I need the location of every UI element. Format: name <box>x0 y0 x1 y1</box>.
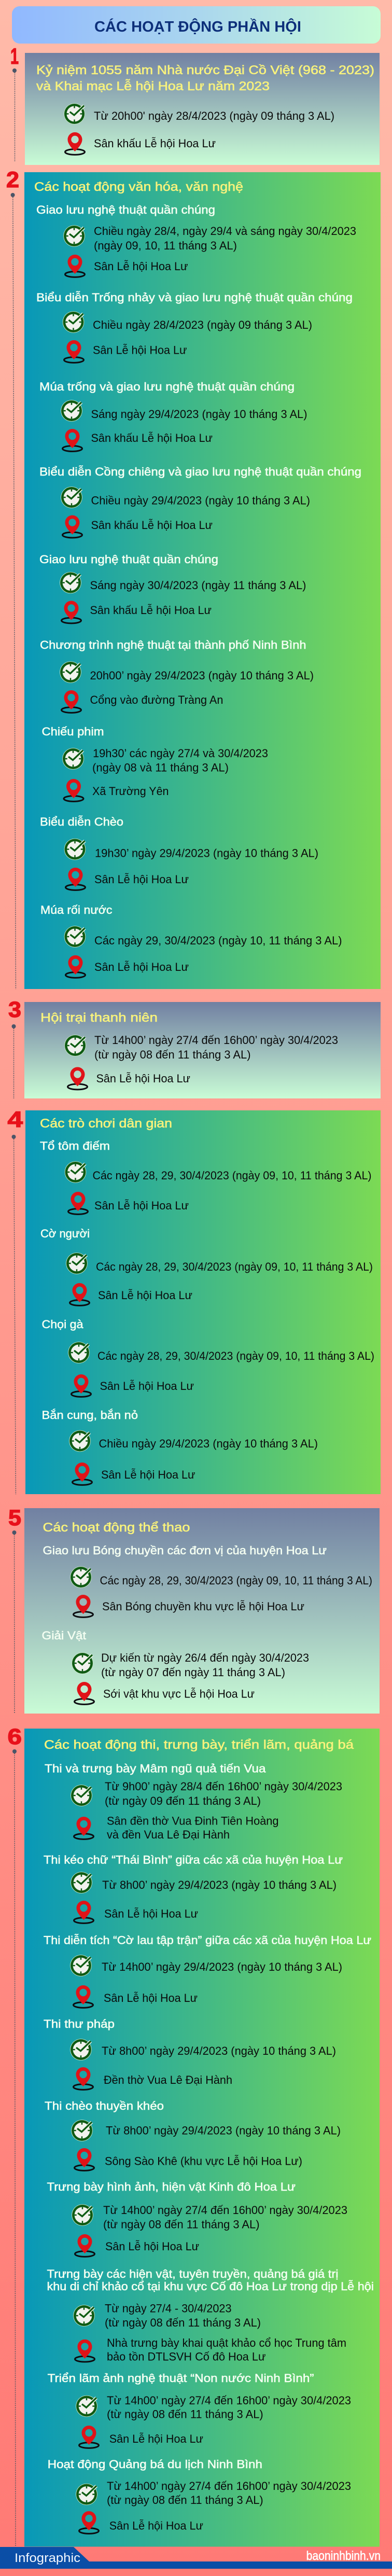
icon: clock <box>76 2484 97 2505</box>
time text: Chiều ngày 29/4/2023 (ngày 10 tháng 3 AL) <box>91 494 310 507</box>
time text: (từ ngày 08 đến 11 tháng 3 AL) <box>107 2494 263 2507</box>
heading: section 6: Các hoạt động thi, trưng bày, triển lãm, quảng bá <box>44 1738 354 1752</box>
place text: Sân khấu Lễ hội Hoa Lư <box>91 431 213 444</box>
subheading: Thi diễn tích “Cờ lau tập trận” giữa các xã của huyện Hoa Lư <box>44 1933 371 1947</box>
heading: section 5: Các hoạt động thể thao <box>43 1521 190 1535</box>
place text: Sân Lễ hội Hoa Lư <box>109 2432 203 2445</box>
icon: clock <box>60 572 81 593</box>
panel: section 4 background <box>25 1110 381 1494</box>
section 1: opening ceremony <box>10 44 380 165</box>
subheading: Múa trống và giao lưu nghệ thuật quần chúng <box>39 380 295 393</box>
panel: section 5 background <box>24 1508 380 1714</box>
icon: clock <box>64 1035 86 1056</box>
subheading: Chọi gà <box>41 1318 83 1331</box>
time text: 19h30’ ngày 29/4/2023 (ngày 10 tháng 3 AL) <box>95 846 318 860</box>
time text: Chiều ngày 28/4, ngày 29/4 và sáng ngày 30/4/2023 <box>94 225 356 238</box>
place text: Sông Sào Khê (khu vực Lễ hội Hoa Lư) <box>105 2154 302 2168</box>
icon: clock <box>73 2305 95 2327</box>
time text: (ngày 08 và 11 tháng 3 AL) <box>92 761 229 774</box>
icon: clock <box>61 486 82 508</box>
time text <box>105 1780 342 1807</box>
panel: section 1 background <box>25 53 380 165</box>
heading: section 1: và Khai mạc Lễ hội Hoa Lư năm 2023 <box>36 79 270 93</box>
time text: Từ 20h00' ngày 28/4/2023 (ngày 09 tháng 3 AL) <box>94 109 334 122</box>
place text: Sân Lễ hội Hoa Lư <box>104 1907 198 1920</box>
icon: location pin <box>69 1283 89 1305</box>
place text: Xã Trường Yên <box>92 785 169 798</box>
icon: location pin <box>67 1067 87 1090</box>
time text: 20h00’ ngày 29/4/2023 (ngày 10 tháng 3 AL) <box>90 669 314 682</box>
heading: section 2: Các hoạt động văn hóa, văn nghệ <box>34 180 243 194</box>
subheading: Thi thư pháp <box>44 2017 115 2030</box>
icon: clock <box>66 1252 88 1274</box>
subheading: Thi chèo thuyền khéo <box>45 2099 164 2112</box>
icon: location pin <box>64 779 83 801</box>
place text <box>107 2336 346 2363</box>
time text: Từ 14h00’ ngày 27/4 đến 16h00’ ngày 30/4/2023 <box>107 2480 351 2493</box>
icon: location pin <box>74 2067 93 2090</box>
subheading: Hoạt động Quảng bá du lịch Ninh Bình <box>48 2458 262 2471</box>
icon: location pin <box>74 1901 93 1923</box>
place text: Sân Lễ hội Hoa Lư <box>93 343 187 357</box>
number 6: 6 <box>7 1724 22 1749</box>
icon: clock <box>70 2039 92 2060</box>
timeline connector 6 <box>12 1749 17 2546</box>
time text: (từ ngày 08 đến 11 tháng 3 AL) <box>94 1048 251 1061</box>
icon: clock <box>63 225 85 247</box>
icon: location pin <box>75 2340 94 2362</box>
time text: 19h30’ các ngày 27/4 và 30/4/2023 <box>93 747 268 760</box>
icon: location pin <box>65 955 85 978</box>
time text: Từ 8h00’ ngày 29/4/2023 (ngày 10 tháng 3 AL) <box>102 2044 336 2057</box>
time text: (từ ngày 08 đến 11 tháng 3 AL) <box>105 2316 261 2329</box>
number 1: 1 <box>10 44 19 69</box>
time text: Từ 14h00’ ngày 27/4 đến 16h00’ ngày 30/4/2023 <box>103 2204 347 2217</box>
icon: clock <box>71 2120 93 2141</box>
time text: Từ ngày 27/4 - 30/4/2023 <box>105 2302 231 2315</box>
icon: location pin <box>68 1192 88 1214</box>
icon: clock <box>70 1566 92 1588</box>
panel: section 2 background <box>24 172 381 989</box>
time text: Chiều ngày 29/4/2023 (ngày 10 tháng 3 AL) <box>99 1437 318 1450</box>
time text: Sáng ngày 30/4/2023 (ngày 11 tháng 3 AL) <box>90 579 306 592</box>
title: CÁC HOẠT ĐỘNG PHẦN HỘI <box>94 18 301 35</box>
icon: location pin <box>75 1682 94 1704</box>
time text: Dự kiến từ ngày 26/4 đến ngày 30/4/2023 <box>101 1651 309 1664</box>
subheading: Giải Vật <box>41 1629 86 1642</box>
panel: section 6 background <box>24 1729 380 2546</box>
time text: (từ ngày 08 đến 11 tháng 3 AL) <box>103 2218 259 2231</box>
icon: location pin <box>74 1595 93 1617</box>
subheading: Trưng bày các hiện vật, tuyên truyền, quảng bá giá trị <box>47 2267 338 2280</box>
heading: section 4: Các trò chơi dân gian <box>40 1117 172 1131</box>
icon: clock <box>70 1955 92 1976</box>
subheading: Múa rối nước <box>40 903 112 916</box>
subheading: khu di chỉ khảo cổ tại khu vực Cố đô Hoa Lư trong dịp Lễ hội <box>47 2280 374 2293</box>
section 3: youth camp <box>8 997 381 1098</box>
icon: clock <box>60 661 81 683</box>
number 2: 2 <box>6 168 19 192</box>
time text: Các ngày 28, 29, 30/4/2023 (ngày 09, 10, 11 tháng 3 AL) <box>96 1260 373 1273</box>
footer label: Infographic <box>15 2551 80 2565</box>
time text: Từ 8h00’ ngày 29/4/2023 (ngày 10 tháng 3 AL) <box>106 2124 341 2137</box>
icon: location pin <box>62 516 82 538</box>
time text <box>103 2204 347 2231</box>
place text: Sân Lễ hội Hoa Lư <box>101 1468 195 1481</box>
icon: location pin <box>72 1374 91 1397</box>
time text: Từ 14h00’ ngày 29/4/2023 (ngày 10 tháng 3 AL) <box>102 1960 342 1973</box>
time text: Các ngày 29, 30/4/2023 (ngày 10, 11 tháng 3 AL) <box>94 934 342 947</box>
heading: section 3: Hội trại thanh niên <box>40 1011 158 1025</box>
time text <box>105 2302 261 2329</box>
time text <box>94 1034 338 1061</box>
time text <box>92 747 268 774</box>
icon: location pin <box>79 2511 99 2533</box>
place text: Sân khấu Lễ hội Hoa Lư <box>91 519 213 532</box>
subheading: Tổ tôm điếm <box>40 1139 110 1152</box>
icon: location pin <box>74 1985 93 2008</box>
place text: Sân Lễ hội Hoa Lư <box>94 960 189 973</box>
time text: Từ 9h00’ ngày 28/4 đến 16h00’ ngày 30/4/2023 <box>105 1780 342 1793</box>
icon: location pin <box>75 2148 94 2170</box>
icon: clock <box>63 311 84 333</box>
time text: (từ ngày 07 đến ngày 11 tháng 3 AL) <box>101 1666 285 1679</box>
time text: (từ ngày 09 đến 11 tháng 3 AL) <box>105 1794 261 1807</box>
icon: location pin <box>61 601 81 623</box>
time text <box>107 2480 351 2507</box>
time text: Sáng ngày 29/4/2023 (ngày 10 tháng 3 AL) <box>91 408 307 421</box>
icon: clock <box>64 926 86 948</box>
place text: Sân Lễ hội Hoa Lư <box>105 2240 199 2253</box>
icon: location pin <box>61 690 81 713</box>
time text <box>107 2394 351 2421</box>
time text: Từ 14h00’ ngày 27/4 đến 16h00’ ngày 30/4/2023 <box>94 1034 338 1047</box>
time text: Từ 14h00’ ngày 27/4 đến 16h00’ ngày 30/4/2023 <box>107 2394 351 2407</box>
footer site name: baoninhbinh.vn <box>306 2549 381 2563</box>
icon: clock <box>76 2396 97 2417</box>
subheading: Cờ người <box>40 1227 90 1240</box>
subheading: Giao lưu nghệ thuật quần chúng <box>36 203 215 216</box>
icon: clock <box>72 1652 93 1674</box>
place text: Sân đền thờ Vua Đinh Tiên Hoàng <box>107 1814 279 1828</box>
heading: section 1: Kỷ niệm 1055 năm Nhà nước Đại Cồ Việt (968 - 2023) <box>36 63 374 77</box>
number 5: 5 <box>8 1506 21 1530</box>
place text: Sân Lễ hội Hoa Lư <box>94 260 188 273</box>
icon: clock <box>62 748 84 770</box>
icon: location pin <box>64 340 84 363</box>
place text: Sân Lễ hội Hoa Lư <box>98 1289 192 1302</box>
title banner <box>12 6 381 44</box>
subheading <box>47 2267 374 2293</box>
place text: Sân Lễ hội Hoa Lư <box>100 1380 194 1393</box>
place text <box>107 1814 279 1841</box>
place text: Sân Lễ hội Hoa Lư <box>96 1072 190 1085</box>
place text: Sới vật khu vực Lễ hội Hoa Lư <box>103 1688 255 1700</box>
time text <box>94 225 356 252</box>
time text: Các ngày 28, 29, 30/4/2023 (ngày 09, 10, 11 tháng 3 AL) <box>100 1574 372 1587</box>
subheading: Biểu diễn Trống nhảy và giao lưu nghệ thuật quần chúng <box>36 291 353 304</box>
place text: bảo tồn DTLSVH Cố đô Hoa Lư <box>107 2350 266 2363</box>
place text: Đền thờ Vua Lê Đại Hành <box>104 2073 232 2086</box>
icon: location pin <box>73 1463 92 1485</box>
place text: Nhà trưng bày khai quật khảo cổ học Trung tâm <box>107 2336 346 2349</box>
time text: Các ngày 28, 29, 30/4/2023 (ngày 09, 10, 11 tháng 3 AL) <box>92 1169 371 1182</box>
place text: Sân khấu Lễ hội Hoa Lư <box>94 137 216 150</box>
time text: (từ ngày 08 đến 11 tháng 3 AL) <box>107 2408 263 2421</box>
time text: (ngày 09, 10, 11 tháng 3 AL) <box>94 239 237 252</box>
timeline connector 5 <box>12 1530 17 1714</box>
subheading: Giao lưu nghệ thuật quần chúng <box>39 553 218 566</box>
subheading: Giao lưu Bóng chuyền các đơn vị của huyện Hoa Lư <box>43 1544 327 1557</box>
icon: location pin <box>65 868 85 890</box>
icon: clock <box>61 400 82 422</box>
place text: Sân Bóng chuyền khu vực lễ hội Hoa Lư <box>102 1600 304 1613</box>
icon: location pin <box>75 2234 94 2257</box>
icon: clock <box>68 1342 90 1363</box>
timeline connector 4 <box>11 1135 16 1494</box>
icon: clock <box>72 2204 93 2226</box>
icon: location pin <box>62 429 82 451</box>
timeline connector 2 <box>11 193 16 989</box>
number 4: 4 <box>7 1107 23 1132</box>
time text: Từ 8h00’ ngày 29/4/2023 (ngày 10 tháng 3 AL) <box>102 1878 337 1891</box>
subheading: Bắn cung, bắn nỏ <box>41 1409 138 1422</box>
icon: clock <box>64 839 86 860</box>
section 2: culture and arts <box>6 168 381 989</box>
number 3: 3 <box>8 997 21 1022</box>
time text: Chiều ngày 28/4/2023 (ngày 09 tháng 3 AL) <box>93 318 312 331</box>
icon: location pin <box>74 1817 93 1839</box>
subheading: Triển lãm ảnh nghệ thuật “Non nước Ninh Bình” <box>48 2372 314 2385</box>
subheading: Chương trình nghệ thuật tại thành phố Ninh Bình <box>40 638 306 651</box>
icon: clock <box>71 1872 92 1893</box>
heading: section 1 <box>36 63 374 93</box>
icon: location pin <box>65 255 85 277</box>
section 6: contests, displays, exhibitions, promotion <box>7 1724 380 2546</box>
icon: location pin <box>65 132 85 155</box>
subheading: Thi kéo chữ “Thái Bình” giữa các xã của huyện Hoa Lư <box>44 1854 343 1866</box>
place text: Sân khấu Lễ hội Hoa Lư <box>90 604 212 617</box>
section 5: sports <box>8 1506 380 1714</box>
icon: clock <box>65 1161 86 1183</box>
icon: location pin <box>79 2426 99 2448</box>
footer <box>0 2547 392 2569</box>
icon: clock <box>71 1785 92 1806</box>
section 4: folk games <box>7 1107 381 1494</box>
time text: Các ngày 28, 29, 30/4/2023 (ngày 09, 10, 11 tháng 3 AL) <box>97 1349 374 1362</box>
place text: và đền Vua Lê Đại Hành <box>107 1828 230 1841</box>
place text: Sân Lễ hội Hoa Lư <box>104 1992 198 2004</box>
place text: Sân Lễ hội Hoa Lư <box>94 1199 189 1212</box>
panel: section 3 background <box>24 1002 381 1098</box>
icon: clock <box>64 103 85 124</box>
place text: Sân Lễ hội Hoa Lư <box>94 873 189 886</box>
place text: Sân Lễ hội Hoa Lư <box>109 2519 203 2532</box>
place text: Cổng vào đường Tràng An <box>90 693 223 706</box>
subheading: Biểu diễn Chèo <box>40 815 123 828</box>
subheading: Thi và trưng bày Mâm ngũ quả tiến Vua <box>45 1762 266 1775</box>
time text <box>101 1651 309 1679</box>
timeline connector 1 <box>12 68 17 162</box>
subheading: Biểu diễn Cồng chiêng và giao lưu nghệ thuật quần chúng <box>39 465 361 478</box>
icon: clock <box>69 1430 91 1452</box>
timeline connector 3 <box>11 1024 16 1098</box>
subheading: Chiếu phim <box>41 725 104 738</box>
subheading: Trưng bày hình ảnh, hiện vật Kinh đô Hoa Lư <box>47 2180 296 2193</box>
